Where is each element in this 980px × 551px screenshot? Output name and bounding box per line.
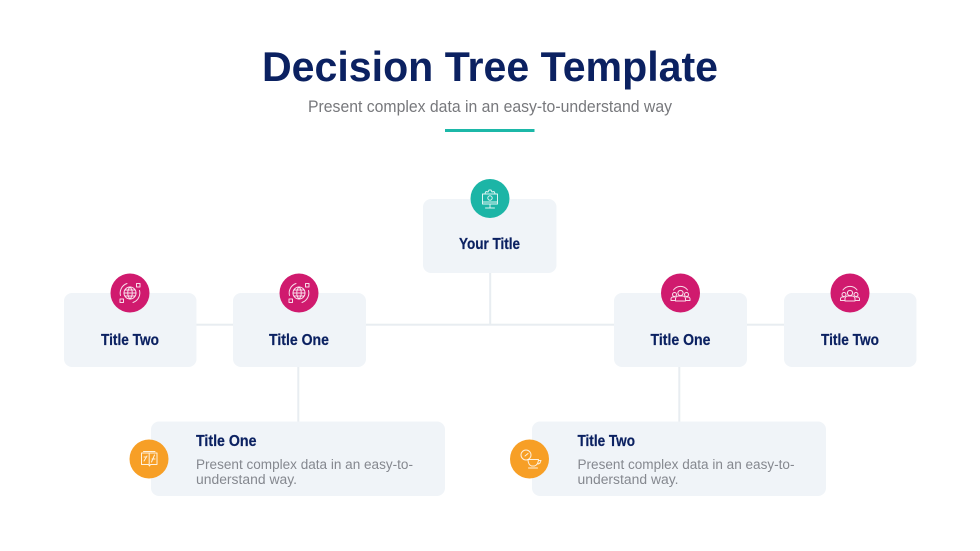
heading: Title Two [578, 433, 635, 450]
title accent underline [445, 129, 534, 132]
title: Decision Tree Template [262, 43, 718, 90]
connector lines [196, 272, 785, 422]
panel: bottom left detail card [130, 422, 445, 496]
label: Title One [269, 332, 329, 349]
body text: Present complex data in an easy-to- [578, 457, 794, 472]
icon: team of people [661, 274, 700, 312]
body text: Present complex data in an easy-to- [196, 457, 413, 472]
panel: root node Your Title [423, 179, 556, 273]
body text [196, 457, 413, 487]
subtitle: Present complex data in an easy-to-understand way [308, 98, 673, 116]
label: Title Two [101, 332, 159, 349]
label: Your Title [459, 236, 520, 253]
icon: coffee cup and clock [510, 440, 549, 478]
body text [578, 457, 794, 487]
panel: right Title Two [784, 274, 916, 367]
icon: team of people [830, 274, 870, 312]
panel: left Title Two [64, 274, 196, 367]
icon: computer with gear [470, 179, 510, 218]
icon: book with symbols [130, 440, 168, 478]
icon: globe [110, 274, 150, 312]
label: Title One [650, 332, 711, 349]
icon: globe [280, 274, 318, 312]
panel: bottom right detail card [510, 422, 826, 496]
heading: Title One [196, 433, 257, 450]
body text: understand way. [196, 472, 297, 487]
panel: right Title One [614, 274, 747, 367]
panel: left Title One [233, 274, 366, 367]
label: Title Two [821, 332, 879, 349]
body text: understand way. [578, 472, 678, 487]
